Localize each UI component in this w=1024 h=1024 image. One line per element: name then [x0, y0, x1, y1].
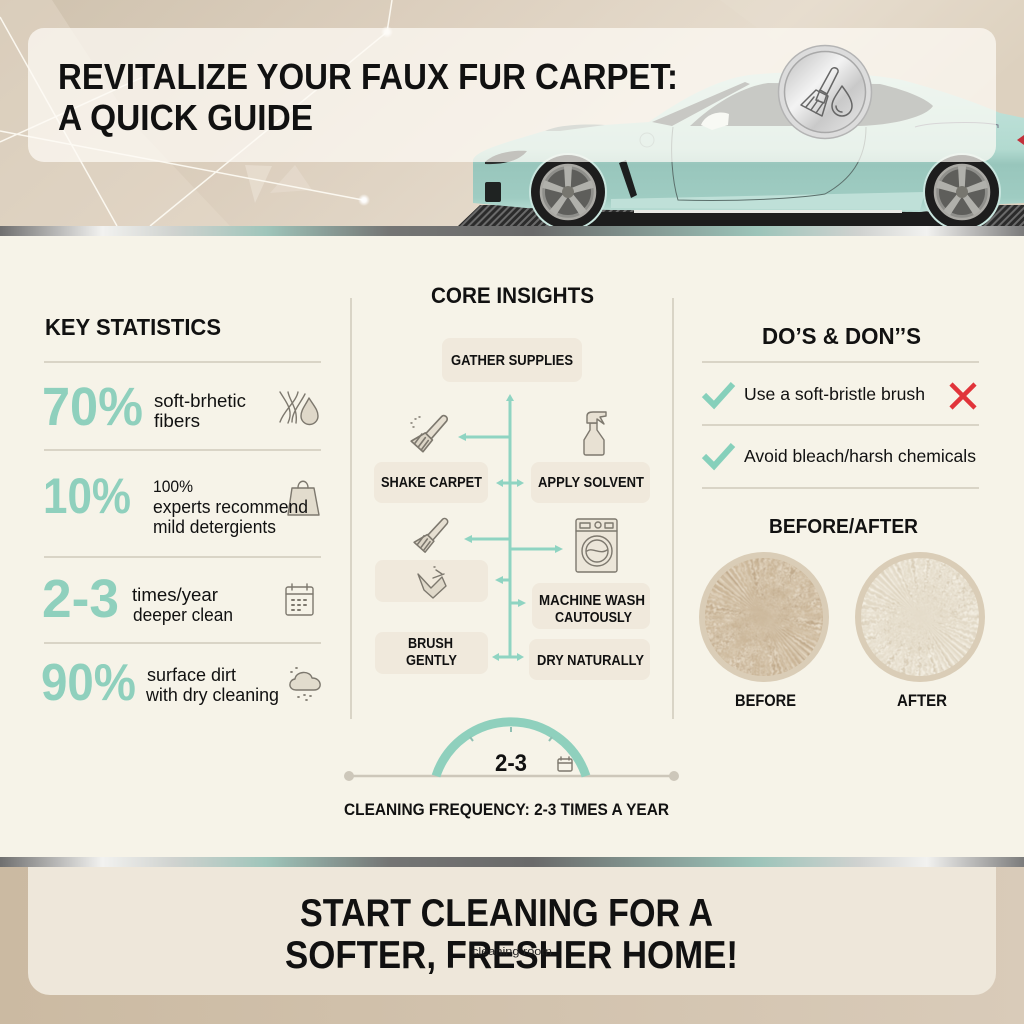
stat: 2-3: 2-3	[42, 569, 119, 629]
title panel	[28, 28, 996, 162]
flow step: dry naturally: DRY NATURALLY	[537, 653, 644, 669]
flow step: apply solvent: APPLY SOLVENT	[538, 475, 644, 491]
icon: small calendar	[558, 757, 572, 771]
flow step: shake carpet	[374, 462, 488, 503]
stat: 10%: 10%	[43, 468, 131, 524]
stat: 10%: experts recommend	[153, 497, 308, 517]
heading: do's and don'ts: DO’S & DON’’S	[762, 323, 921, 349]
icon: red cross	[951, 384, 975, 408]
title	[58, 56, 678, 138]
image: before fur	[699, 552, 829, 682]
panel: core insights	[374, 283, 650, 680]
stat: 2-3: times/year	[132, 585, 218, 605]
flow step: gather supplies: GATHER SUPPLIES	[451, 353, 573, 369]
flow step: dry naturally	[529, 639, 650, 680]
label: before: BEFORE	[735, 692, 796, 710]
flow step: unlabeled card with icon	[375, 560, 488, 602]
icon: brush and drop medallion	[778, 46, 872, 138]
flow step: machine wash cautiously	[532, 583, 650, 629]
stat: 90%	[41, 654, 279, 712]
panel: do's and don'ts	[699, 323, 985, 710]
footer call to action	[28, 867, 996, 995]
do: soft-bristle brush: Use a soft-bristle brush	[744, 384, 925, 404]
dark road shadow	[560, 212, 960, 226]
stat: 90%: surface dirt	[147, 665, 236, 685]
flow step: machine wash cautiously: CAUTOUSLY	[555, 610, 632, 626]
gauge: cleaning frequency	[344, 722, 679, 819]
flow step: brush gently	[375, 632, 488, 674]
stat: 2-3	[42, 569, 233, 629]
stat: 70%: soft-brhetic	[154, 391, 246, 411]
carbon ground under car	[458, 205, 1024, 226]
panel: key statistics	[41, 314, 321, 712]
bottom metallic band	[0, 857, 1024, 867]
stat: 90%: with dry cleaning	[145, 685, 279, 705]
stat: 70%: 70%	[42, 377, 143, 437]
title: REVITALIZE YOUR FAUX FUR CARPET:	[58, 56, 678, 97]
footer background	[0, 867, 1024, 1024]
flow step: gather supplies	[442, 338, 582, 382]
header banner	[0, 0, 1024, 231]
icon: washing machine	[576, 519, 617, 572]
do: avoid bleach: Avoid bleach/harsh chemicals	[744, 446, 976, 466]
divider right	[672, 298, 674, 719]
stat: 10%	[43, 468, 319, 537]
flow step: shake carpet: SHAKE CARPET	[381, 475, 482, 491]
heading: before/after: BEFORE/AFTER	[769, 515, 918, 538]
stat: 90%: 90%	[41, 654, 136, 712]
flow step: brush gently: BRUSH	[408, 636, 453, 652]
icon: dust cloud	[290, 668, 320, 700]
flow step: brush gently: GENTLY	[406, 653, 457, 669]
footer call to action: START CLEANING FOR A	[300, 892, 713, 935]
car illustration	[473, 72, 1024, 231]
top metallic band	[0, 226, 1024, 236]
icon: fibers and drop	[280, 392, 318, 424]
footer call to action: SOFTER, FRESHER HOME!	[285, 934, 738, 977]
icon: spray bottle	[584, 412, 606, 455]
divider left	[350, 298, 352, 719]
title: A QUICK GUIDE	[58, 97, 313, 138]
caption: cleaning frequency: CLEANING FREQUENCY: 2-3 TIMES A YEAR	[344, 801, 669, 819]
image: after fur	[855, 552, 985, 682]
icon: calendar	[286, 584, 313, 615]
icon: detergent bag	[288, 481, 319, 515]
stat: 2-3: deeper clean	[133, 605, 233, 625]
stat: 10%: 100%	[153, 477, 193, 496]
icon: brush	[414, 518, 448, 552]
flow arrows	[458, 394, 563, 661]
label: after: AFTER	[897, 692, 947, 710]
flow step: machine wash cautiously: MACHINE WASH	[539, 593, 645, 609]
flow step: apply solvent	[531, 462, 650, 503]
heading: key statistics: KEY STATISTICS	[45, 314, 221, 340]
stat: 70%	[42, 377, 246, 437]
heading: core insights: CORE INSIGHTS	[431, 283, 594, 308]
gauge: cleaning frequency: 2-3	[495, 750, 527, 777]
stat: 10%: mild detergients	[153, 517, 276, 537]
footer call to action: cleaning room	[472, 946, 552, 958]
icon: brush with dust	[411, 416, 447, 452]
stat: 70%: fibers	[154, 411, 200, 431]
